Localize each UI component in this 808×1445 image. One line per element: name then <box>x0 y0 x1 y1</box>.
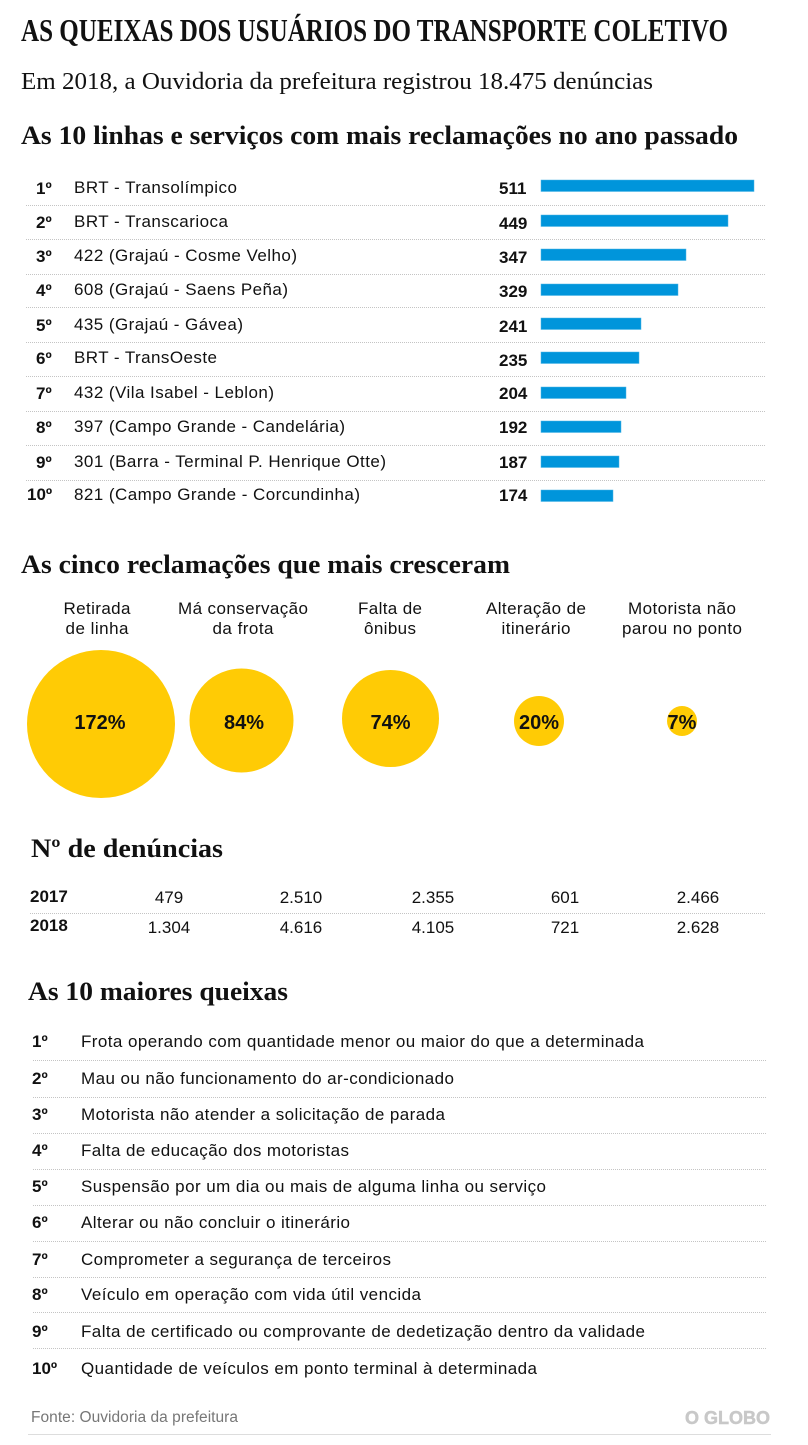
row 9 <box>36 452 619 472</box>
bubble: Má conservação da frota: da frota <box>212 619 274 638</box>
complaint 5: 5º <box>32 1177 48 1196</box>
table row 2018: 2.628 <box>677 918 719 937</box>
row 10: 10º <box>27 485 52 504</box>
row 3: 347 <box>499 248 527 267</box>
row 2 <box>36 212 728 233</box>
bubble: Falta de ônibus: ônibus <box>364 619 416 638</box>
row 2: 2º <box>36 213 52 232</box>
logo: O Globo: O GLOBO <box>685 1408 770 1428</box>
complaint 1: 1º <box>32 1032 48 1051</box>
row 8 <box>36 417 621 437</box>
table row 2018: 4.616 <box>280 918 322 937</box>
table row 2017: 2.510 <box>280 888 322 907</box>
table row 2018 <box>30 916 719 937</box>
row 3: 422 (Grajaú - Cosme Velho) <box>74 246 297 265</box>
complaint 1: Frota operando com quantidade menor ou maior do que a determinada <box>81 1032 645 1051</box>
row 7 <box>36 383 626 403</box>
heading: top 10 lines: As 10 linhas e serviços com mais reclamações no ano passado <box>21 121 738 150</box>
row 6 <box>36 348 639 370</box>
bubble: Alteração de itinerário: itinerário <box>502 619 570 638</box>
row 6: 6º <box>36 349 52 368</box>
row 4: 4º <box>36 281 52 300</box>
heading: five complaints: As cinco reclamações que mais cresceram <box>21 550 510 579</box>
bubble: Má conservação da frota <box>178 599 308 772</box>
bubble: Falta de ônibus: 74% <box>370 712 411 734</box>
bubble: Má conservação da frota: 84% <box>224 712 264 734</box>
heading: top 10 complaints: As 10 maiores queixas <box>28 977 288 1006</box>
row 5: 435 (Grajaú - Gávea) <box>74 315 243 334</box>
row 1 <box>36 178 754 198</box>
table row 2018: 1.304 <box>148 918 190 937</box>
table row 2018: 4.105 <box>412 918 454 937</box>
bubble: Falta de ônibus: Falta de <box>358 599 422 618</box>
row 5: 5º <box>36 316 52 335</box>
row 2: 449 <box>499 214 527 233</box>
source: Fonte: Ouvidoria da prefeitura <box>31 1409 238 1426</box>
complaint 8: Veículo em operação com vida útil vencida <box>81 1285 422 1304</box>
bubble: Motorista não parou no ponto <box>622 599 742 736</box>
heading: number of complaints: Nº de denúncias <box>31 834 223 863</box>
bubble: Retirada de linha: Retirada <box>64 599 131 618</box>
bubble: Alteração de itinerário: 20% <box>519 712 559 734</box>
bubble: Motorista não parou no ponto: Motorista não <box>628 599 736 618</box>
complaint 10: 10º <box>32 1359 57 1378</box>
complaint 7: 7º <box>32 1250 48 1269</box>
complaint 10: Quantidade de veículos em ponto terminal à determinada <box>81 1359 538 1378</box>
complaint 3: Motorista não atender a solicitação de parada <box>81 1105 446 1124</box>
panel: top 10 complaints <box>28 977 766 1378</box>
row 8: 192 <box>499 418 527 437</box>
row 8: 397 (Campo Grande - Candelária) <box>74 417 345 436</box>
table row 2017: 2.466 <box>677 888 719 907</box>
row 7: 7º <box>36 384 52 403</box>
row 5: 241 <box>499 317 527 336</box>
row 10: 174 <box>499 486 528 505</box>
bubble: Má conservação da frota: Má conservação <box>178 599 308 618</box>
row 5 <box>36 315 641 336</box>
row 8: 8º <box>36 418 52 437</box>
complaint 7: Comprometer a segurança de terceiros <box>81 1250 391 1269</box>
complaint 6: Alterar ou não concluir o itinerário <box>81 1213 350 1232</box>
subtitle: Em 2018, a Ouvidoria da prefeitura registrou 18.475 denúncias <box>21 69 653 95</box>
row 4: 608 (Grajaú - Saens Peña) <box>74 280 288 299</box>
complaint 2: Mau ou não funcionamento do ar-condicionado <box>81 1069 454 1088</box>
complaint 6: 6º <box>32 1213 48 1232</box>
complaint 5: Suspensão por um dia ou mais de alguma linha ou serviço <box>81 1177 546 1196</box>
row 1: 511 <box>499 179 526 198</box>
table row 2018: 2018 <box>30 916 68 935</box>
table row 2017: 2.355 <box>412 888 454 907</box>
row 10: 821 (Campo Grande - Corcundinha) <box>74 485 360 504</box>
table row 2017: 2017 <box>30 887 68 906</box>
complaint 9: Falta de certificado ou comprovante de dedetização dentro da validade <box>81 1322 645 1341</box>
table row 2017: 479 <box>155 888 183 907</box>
row 4: 329 <box>499 282 527 301</box>
row 9: 301 (Barra - Terminal P. Henrique Otte) <box>74 452 386 471</box>
row 6: BRT - TransOeste <box>74 348 217 367</box>
bubble: Motorista não parou no ponto: 7% <box>668 712 697 734</box>
complaint 4: Falta de educação dos motoristas <box>81 1141 349 1160</box>
complaint 8: 8º <box>32 1285 48 1304</box>
bubble: Alteração de itinerário: Alteração de <box>486 599 586 618</box>
bubble: Alteração de itinerário <box>486 599 586 746</box>
complaint 9: 9º <box>32 1322 48 1341</box>
row 3 <box>36 246 686 267</box>
panel: five fastest growing complaints <box>21 550 742 798</box>
row 3: 3º <box>36 247 52 266</box>
row 1: BRT - Transolímpico <box>74 178 237 197</box>
panel: number of complaints table <box>30 834 766 937</box>
table row 2017: 601 <box>551 888 579 907</box>
row 2: BRT - Transcarioca <box>74 212 229 231</box>
complaint 2: 2º <box>32 1069 48 1088</box>
row 10 <box>27 485 613 505</box>
row 7: 204 <box>499 384 528 403</box>
complaint 3: 3º <box>32 1105 48 1124</box>
bubble: Retirada de linha: de linha <box>66 619 129 638</box>
table row 2017 <box>30 887 719 907</box>
complaint 4: 4º <box>32 1141 48 1160</box>
table row 2018: 721 <box>551 918 579 937</box>
row 7: 432 (Vila Isabel - Leblon) <box>74 383 274 402</box>
bubble: Retirada de linha <box>27 599 175 798</box>
bubble: Retirada de linha: 172% <box>74 712 126 734</box>
row 9: 9º <box>36 453 52 472</box>
row 6: 235 <box>499 351 527 370</box>
bubble: Falta de ônibus <box>342 599 439 767</box>
row 4 <box>36 280 678 301</box>
row 1: 1º <box>36 179 52 198</box>
panel: top 10 lines and services <box>21 121 766 505</box>
bubble: Motorista não parou no ponto: parou no ponto <box>622 619 742 638</box>
row 9: 187 <box>499 453 527 472</box>
